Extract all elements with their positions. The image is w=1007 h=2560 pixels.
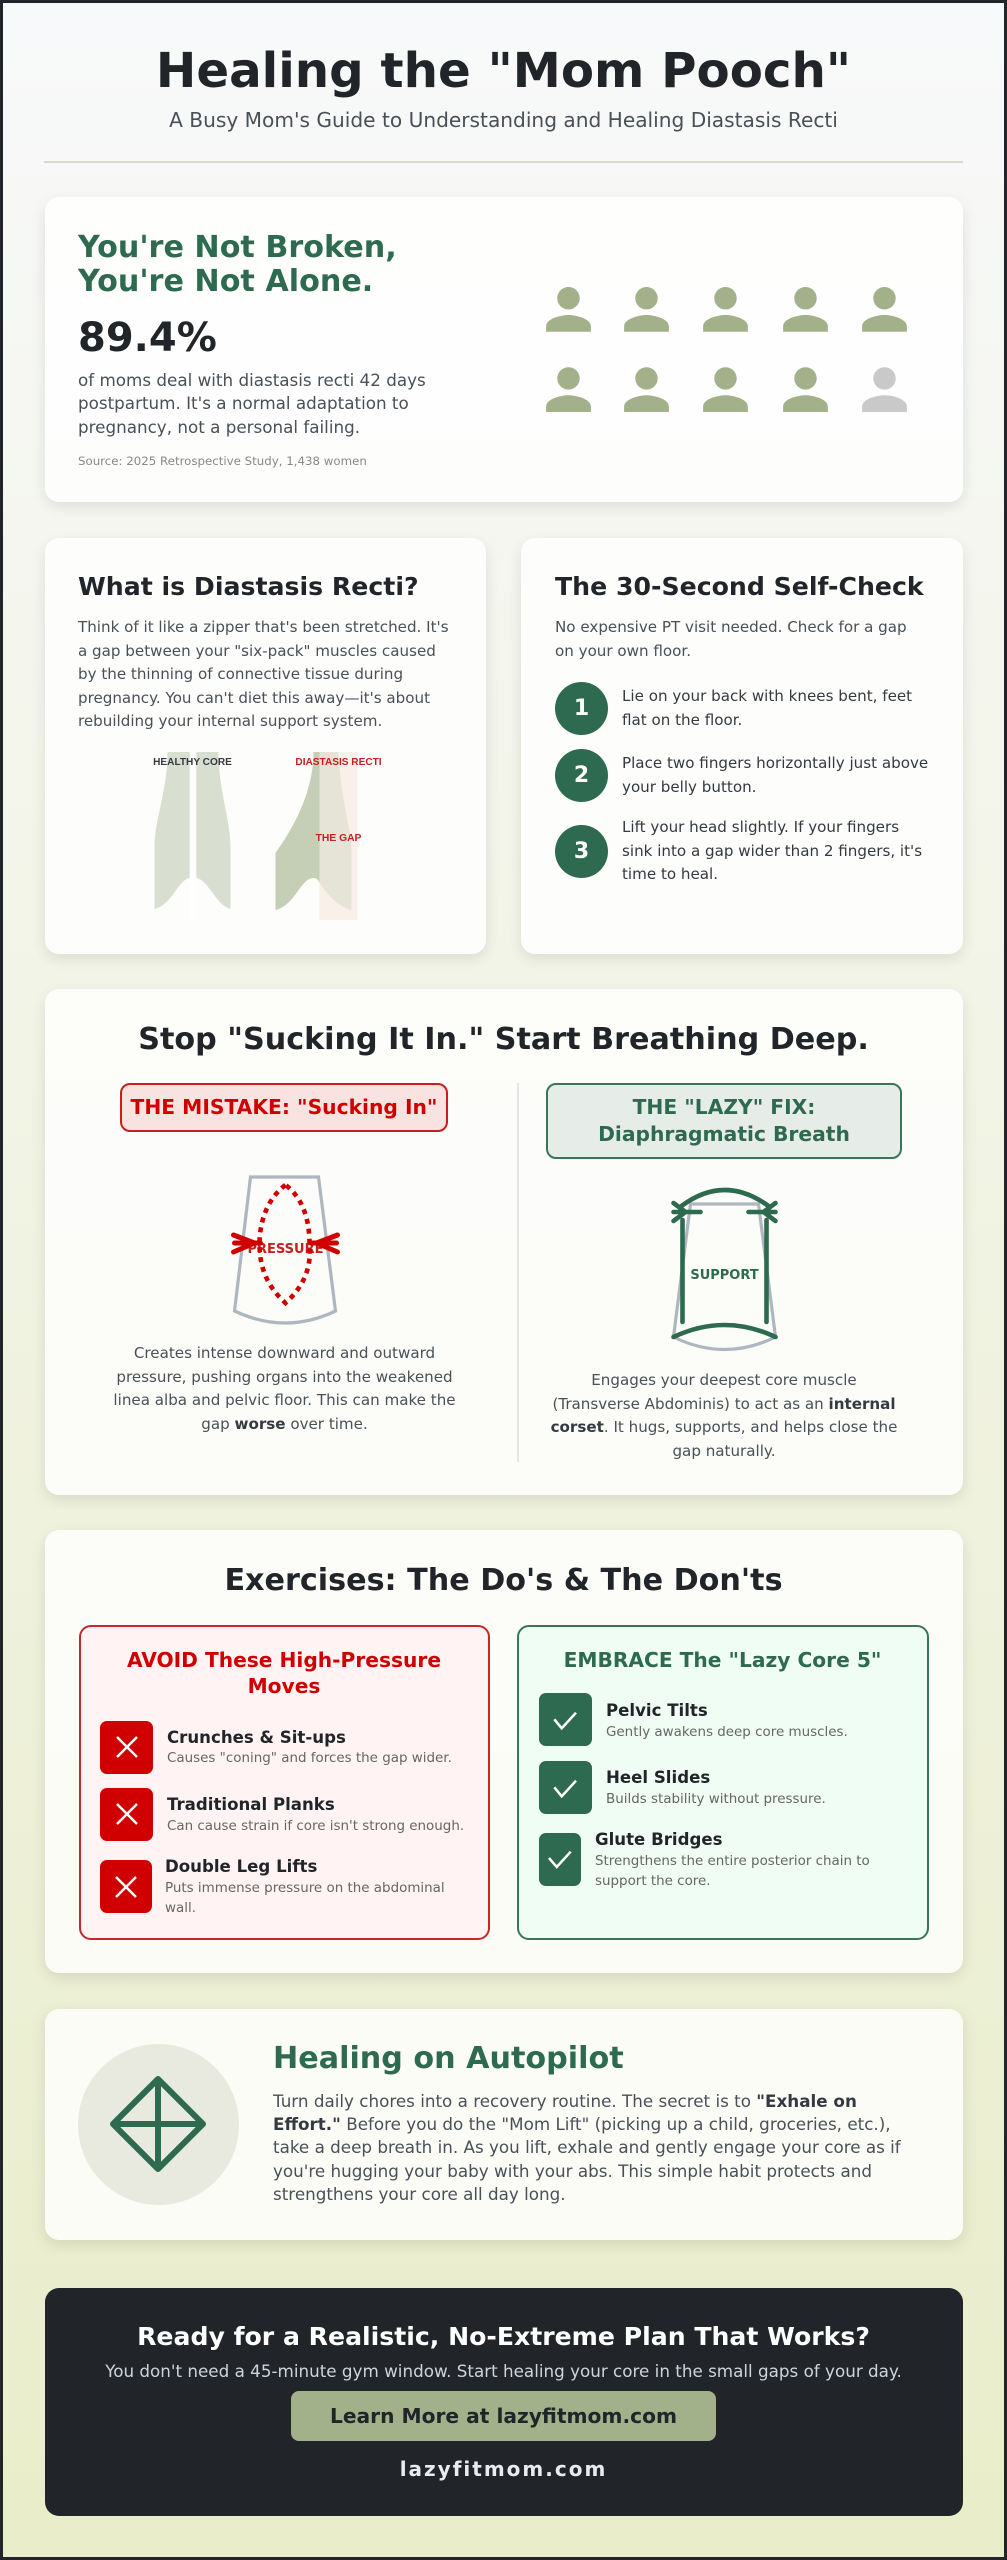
statistic description: of moms deal with diastasis recti 42 days <box>78 370 426 390</box>
diagrams: pressure and support torsos: SUPPORT <box>690 1268 758 1283</box>
heading: Healing on Autopilot <box>273 2041 624 2076</box>
explanation text: rebuilding your internal support system. <box>78 712 382 730</box>
mistake description: gap worse over time. <box>201 1414 368 1432</box>
icon: x 3 <box>100 1860 152 1913</box>
subtitle: A Busy Mom's Guide to Understanding and Healing Diastasis Recti <box>169 108 838 132</box>
badge: the mistake <box>120 1083 448 1132</box>
step 3 text <box>622 818 922 883</box>
mistake description <box>113 1344 456 1432</box>
icon: check 1 <box>539 1693 592 1746</box>
step 3 number: 3 <box>574 839 589 864</box>
glute bridges description: support the core. <box>595 1874 711 1888</box>
button <box>291 2391 716 2441</box>
cta subtext: You don't need a 45-minute gym window. Start healing your core in the small gaps of your day. <box>105 2360 902 2380</box>
avoid heading <box>127 1648 441 1698</box>
statistic description: postpartum. It's a normal adaptation to <box>78 393 409 413</box>
avoid heading: AVOID These High-Pressure <box>127 1648 441 1672</box>
panel: call to action <box>44 2288 962 2516</box>
heading: The 30-Second Self-Check <box>555 572 924 601</box>
step 1 number <box>555 682 608 735</box>
mistake description: pressure, pushing organs into the weakened <box>116 1368 453 1386</box>
crunches description: Causes "coning" and forces the gap wider. <box>167 1750 452 1766</box>
step 2 text <box>622 754 928 796</box>
fix description: corset. It hugs, supports, and helps close the <box>551 1418 897 1436</box>
body text: Effort." Before you do the "Mom Lift" (picking up a child, groceries, etc.), <box>273 2114 891 2134</box>
panel: self-check <box>521 538 962 954</box>
title: Healing the "Mom Pooch" <box>156 43 851 99</box>
mistake description: Creates intense downward and outward <box>134 1344 435 1362</box>
body text: take a deep breath in. As you lift, exhale and gently engage your core as if <box>273 2137 901 2157</box>
heading: not broken: You're Not Broken, <box>78 230 397 265</box>
fix description: Engages your deepest core muscle <box>591 1371 857 1389</box>
step 2 number: 2 <box>574 763 589 788</box>
panel: avoid moves <box>78 1625 490 1940</box>
statistic description <box>78 370 426 436</box>
avoid heading: Moves <box>248 1674 320 1698</box>
panel: not alone statistic <box>44 197 962 502</box>
step 3 text: Lift your head slightly. If your fingers <box>622 818 899 836</box>
badge: the lazy fix: THE "LAZY" FIX: <box>633 1095 815 1119</box>
statistic description: pregnancy, not a personal failing. <box>78 416 360 436</box>
step 3 text: time to heal. <box>622 865 718 883</box>
planks title: Traditional Planks <box>167 1794 335 1814</box>
panel: what is diastasis recti <box>44 538 486 954</box>
body text: you're hugging your baby with your abs. This simple habit protects and <box>273 2161 872 2181</box>
badge: the lazy fix <box>546 1083 902 1159</box>
glute bridges description: Strengthens the entire posterior chain to <box>595 1854 870 1868</box>
intro text: on your own floor. <box>555 642 691 660</box>
panel: breathing comparison <box>44 989 962 1495</box>
leg lifts description: Puts immense pressure on the abdominal <box>165 1880 445 1896</box>
explanation text: by the thinning of connective tissue during <box>78 665 403 683</box>
heading: not broken: You're Not Alone. <box>78 264 373 299</box>
step 1 number: 1 <box>574 696 589 721</box>
explanation text: a gap between your "six-pack" muscles caused <box>78 642 436 660</box>
diagram: healthy core vs diastasis: HEALTHY CORE <box>153 757 232 768</box>
heading: not broken <box>78 230 397 299</box>
heel slides description: Builds stability without pressure. <box>606 1792 826 1806</box>
icon: check 3 <box>539 1833 581 1886</box>
leg lifts description: wall. <box>165 1900 196 1916</box>
diagram: healthy core vs diastasis <box>153 752 381 920</box>
explanation text: pregnancy. You can't diet this away—it's about <box>78 688 430 706</box>
explanation text: Think of it like a zipper that's been stretched. It's <box>78 618 449 636</box>
diagrams: pressure and support torsos: PRESSURE <box>247 1242 323 1257</box>
panel: exercises <box>44 1530 962 1973</box>
source note: Source: 2025 Retrospective Study, 1,438 women <box>78 454 367 468</box>
step 1 text: flat on the floor. <box>622 710 742 728</box>
diagram: healthy core vs diastasis: THE GAP <box>315 833 361 844</box>
icon array: 9 of 10 people <box>546 287 907 412</box>
icon: x 2 <box>100 1788 153 1841</box>
heading: Stop "Sucking It In." Start Breathing Deep. <box>138 1022 869 1057</box>
intro text <box>555 618 907 660</box>
step 1 text: Lie on your back with knees bent, feet <box>622 687 912 705</box>
leg lifts description <box>165 1880 445 1916</box>
step 3 text: sink into a gap wider than 2 fingers, it's <box>622 842 922 860</box>
pelvic tilts description: Gently awakens deep core muscles. <box>606 1724 848 1740</box>
body text: strengthens your core all day long. <box>273 2184 566 2204</box>
mistake description: linea alba and pelvic floor. This can make the <box>113 1391 456 1409</box>
body text <box>272 2091 901 2204</box>
step 2 text: your belly button. <box>622 778 756 796</box>
panel: embrace moves <box>516 1625 928 1940</box>
icon: x 1 <box>100 1721 153 1774</box>
button: Learn More at lazyfitmom.com <box>330 2404 677 2428</box>
fix description: (Transverse Abdominis) to act as an internal <box>552 1394 896 1412</box>
heading: Exercises: The Do's & The Don'ts <box>224 1563 783 1598</box>
icon: check 2 <box>539 1761 592 1814</box>
site url: lazyfitmom.com <box>400 2457 607 2481</box>
step 3 number <box>555 825 608 878</box>
cta heading: Ready for a Realistic, No-Extreme Plan That Works? <box>137 2322 870 2351</box>
pelvic tilts title: Pelvic Tilts <box>606 1700 708 1720</box>
intro text: No expensive PT visit needed. Check for a gap <box>555 618 907 636</box>
glute bridges title: Glute Bridges <box>595 1830 722 1848</box>
glute bridges description <box>595 1854 870 1888</box>
planks description: Can cause strain if core isn't strong enough. <box>167 1818 464 1834</box>
leg lifts title: Double Leg Lifts <box>165 1856 317 1876</box>
heading: What is Diastasis Recti? <box>78 572 419 601</box>
step 2 text: Place two fingers horizontally just above <box>622 754 928 772</box>
fix description <box>551 1371 897 1460</box>
diagram: healthy core vs diastasis: DIASTASIS RECTI <box>295 757 381 768</box>
heel slides title: Heel Slides <box>606 1768 710 1786</box>
fix description: gap naturally. <box>672 1442 776 1460</box>
crunches title: Crunches & Sit-ups <box>167 1728 346 1746</box>
statistic: 89.4%: 89.4% <box>78 315 217 361</box>
step 2 number <box>555 749 608 802</box>
body text: Turn daily chores into a recovery routine. The secret is to "Exhale on <box>273 2091 857 2111</box>
step 1 text <box>622 687 912 728</box>
panel: healing on autopilot <box>44 2009 962 2240</box>
badge: the mistake: THE MISTAKE: "Sucking In" <box>131 1095 437 1119</box>
embrace heading: EMBRACE The "Lazy Core 5" <box>564 1648 881 1672</box>
diagrams: pressure and support torsos <box>231 1175 778 1352</box>
badge: the lazy fix: Diaphragmatic Breath <box>598 1122 850 1146</box>
icon: diamond in circle <box>78 2044 239 2205</box>
explanation text <box>78 618 449 730</box>
